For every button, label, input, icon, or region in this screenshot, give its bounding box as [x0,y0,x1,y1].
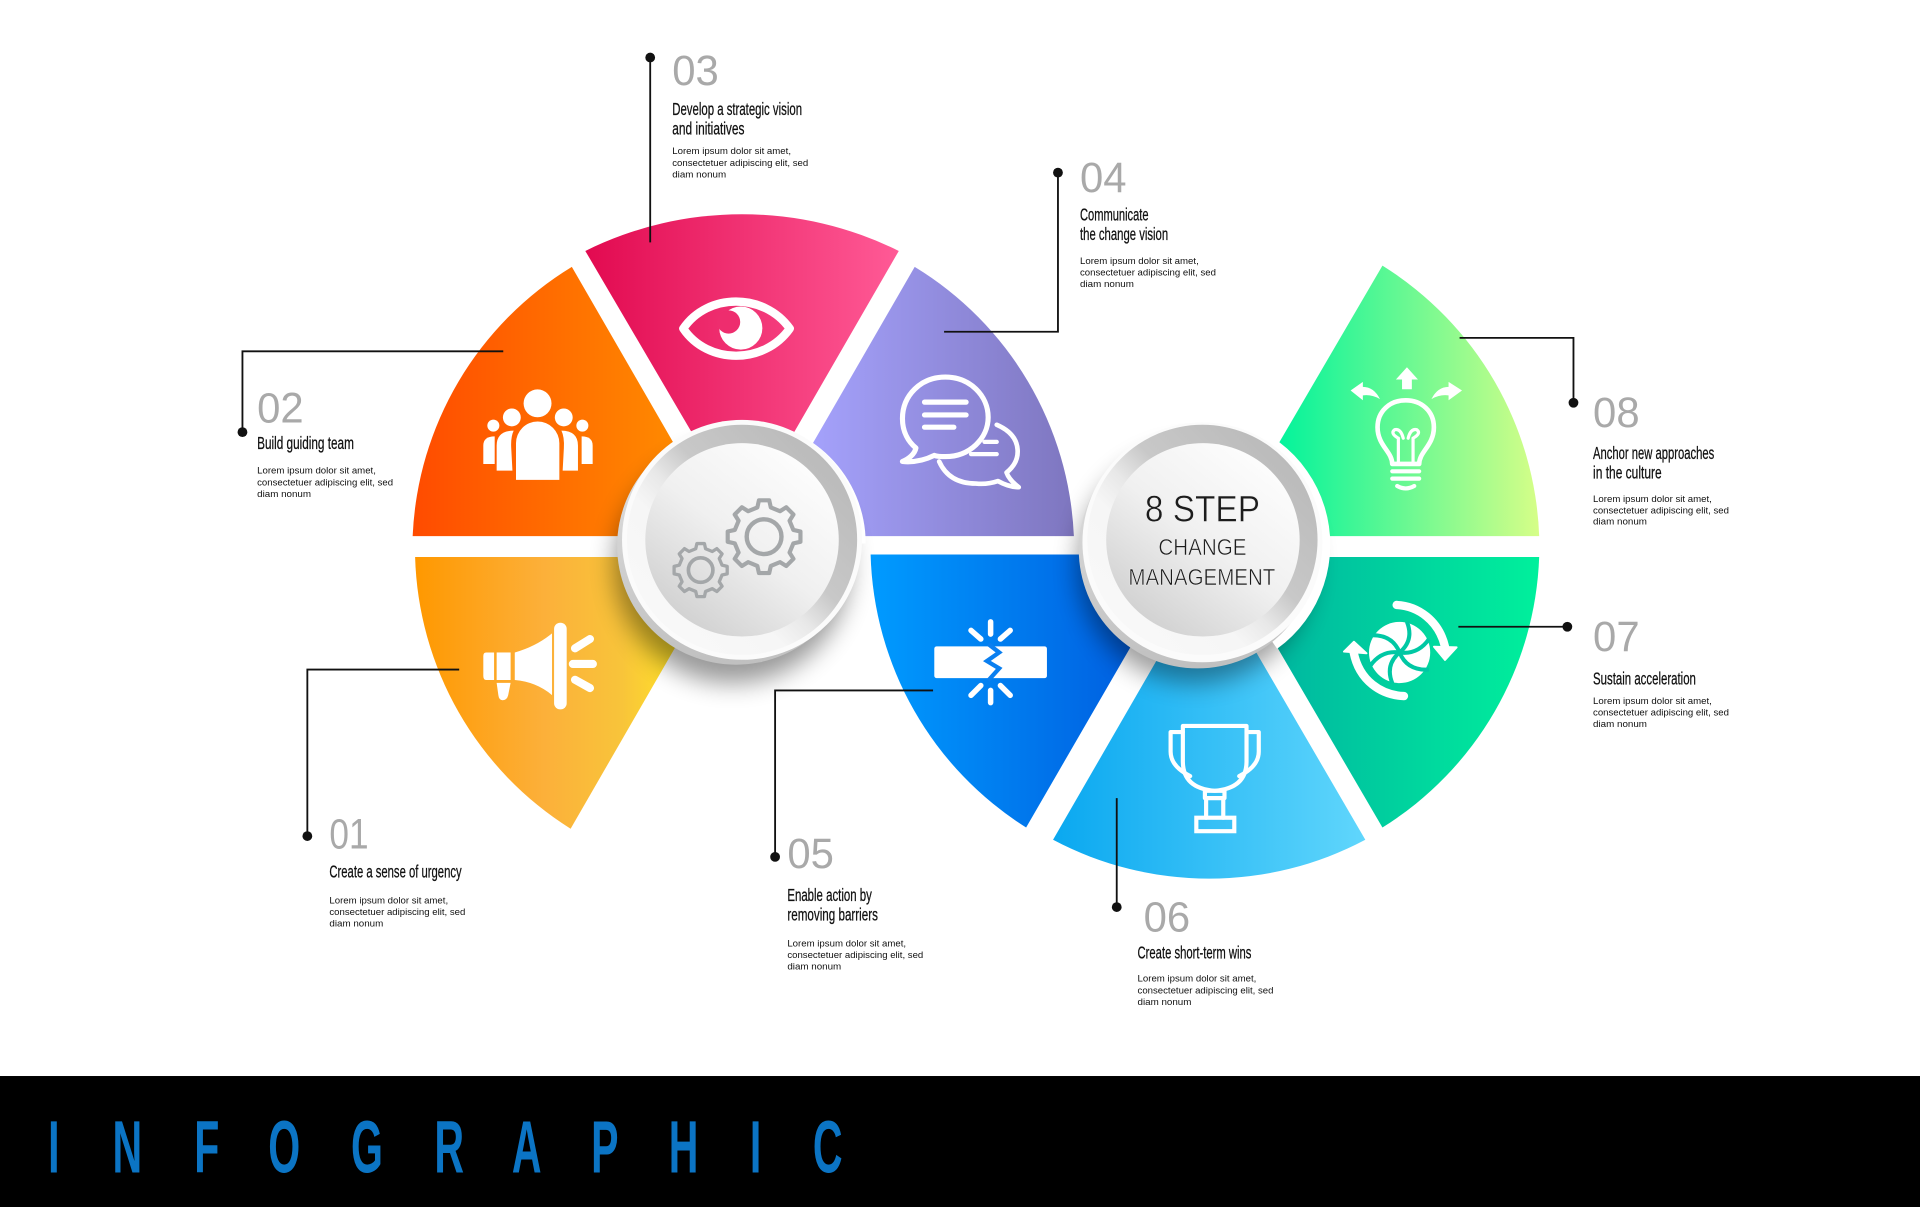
step 01: create a sense of urgency [302,557,727,930]
text 07 [1593,613,1729,730]
step 03: develop a strategic vision [585,47,899,520]
text 08: diam nonum [1593,517,1647,528]
text 02: 02 [257,384,304,432]
segment 01 [415,557,727,829]
text 04: Lorem ipsum dolor sit amet, [1080,256,1199,267]
text 06: Lorem ipsum dolor sit amet, [1138,974,1256,985]
segment 02 [413,267,727,536]
text 03: Lorem ipsum dolor sit amet, [672,146,791,157]
text 07: consectetuer adipiscing elit, sed [1593,708,1729,719]
step 08: anchor new approaches in the culture [1224,266,1729,536]
icon: light bulb with arrows [1351,367,1462,488]
text 01: diam nonum [329,919,383,930]
text 06: consectetuer adipiscing elit, sed [1138,985,1273,996]
left hub: gears button [615,420,866,683]
text 08: consectetuer adipiscing elit, sed [1593,506,1729,517]
text 04: the change vision [1080,224,1168,244]
text 02 [257,384,393,500]
text 02: diam nonum [257,489,311,500]
text 08 [1593,389,1729,528]
text 02: consectetuer adipiscing elit, sed [257,477,393,488]
leader line 01 [302,670,459,841]
text 04: Communicate [1080,204,1149,224]
leader line 07 [1458,622,1572,632]
text 06 [1138,894,1273,1008]
icon: trophy [1171,726,1259,831]
text 03: diam nonum [672,170,726,180]
leader line 06 [1112,798,1122,912]
step 07: sustain acceleration [1224,557,1729,828]
text 01 [329,810,465,930]
segment 07 [1224,557,1539,828]
text 04: consectetuer adipiscing elit, sed [1080,267,1216,278]
text 01: Lorem ipsum dolor sit amet, [329,895,448,906]
leader line 05 [770,690,933,862]
hub title: 8 STEP [1145,488,1260,529]
text 07: Lorem ipsum dolor sit amet, [1593,696,1712,707]
step 06: create short-term wins [1053,570,1365,1008]
text 06: diam nonum [1138,997,1191,1008]
icon: chat bubbles [902,377,1019,487]
icon: turbine with rotation arrows [1344,605,1457,696]
footer title: infographic: INFOGRAPHIC [48,1105,843,1189]
icon: team of people [483,389,593,480]
step 04: communicate the change vision [759,154,1216,536]
segment 03 [585,214,899,520]
text 05: Enable action by [787,885,872,905]
text 08: Lorem ipsum dolor sit amet, [1593,494,1712,505]
text 07: Sustain acceleration [1593,668,1696,688]
leader line 04 [944,168,1063,332]
text 01: Create a sense of urgency [329,862,462,882]
leader line 03 [645,53,655,242]
text 07: diam nonum [1593,719,1647,730]
text 08: 08 [1593,389,1640,437]
text 04: 04 [1080,154,1127,202]
segment 08 [1224,266,1539,536]
text 03: consectetuer adipiscing elit, sed [672,158,808,169]
text 03: and initiatives [672,119,745,139]
segment 05 [871,555,1184,828]
footer band [0,1076,1920,1207]
text 01: consectetuer adipiscing elit, sed [329,907,465,918]
text 06: Create short-term wins [1138,943,1252,962]
text 04 [1080,154,1216,290]
text 06: 06 [1144,894,1190,942]
text 05: consectetuer adipiscing elit, sed [787,950,923,961]
text 07: 07 [1593,613,1640,661]
text 05: Lorem ipsum dolor sit amet, [787,938,906,949]
text 01: 01 [329,810,369,858]
step 05: enable action by removing barriers [770,555,1184,973]
text 05: removing barriers [787,905,878,925]
text 03 [672,47,808,180]
segment 04 [759,267,1074,536]
text 03: 03 [672,47,719,95]
icon: gears [674,500,800,597]
hub title: CHANGE [1158,534,1247,560]
text 05: diam nonum [787,962,841,973]
icon: eye [683,302,790,356]
step 02: build guiding team [238,267,727,536]
right hub: 8 step change management [1078,416,1330,683]
icon: megaphone [483,623,593,709]
text 04: diam nonum [1080,279,1134,290]
text 03: Develop a strategic vision [672,99,802,119]
text 02: Lorem ipsum dolor sit amet, [257,466,376,477]
segment 06 [1053,570,1365,879]
hub title: MANAGEMENT [1128,564,1275,590]
text 08: in the culture [1593,463,1662,483]
text 05 [787,830,923,973]
text 08: Anchor new approaches [1593,443,1714,463]
leader line 08 [1460,338,1578,408]
icon: broken barrier [934,622,1047,703]
leader line 02 [238,351,503,437]
hub title [1128,488,1275,590]
text 05: 05 [787,830,834,878]
text 02: Build guiding team [257,433,354,453]
